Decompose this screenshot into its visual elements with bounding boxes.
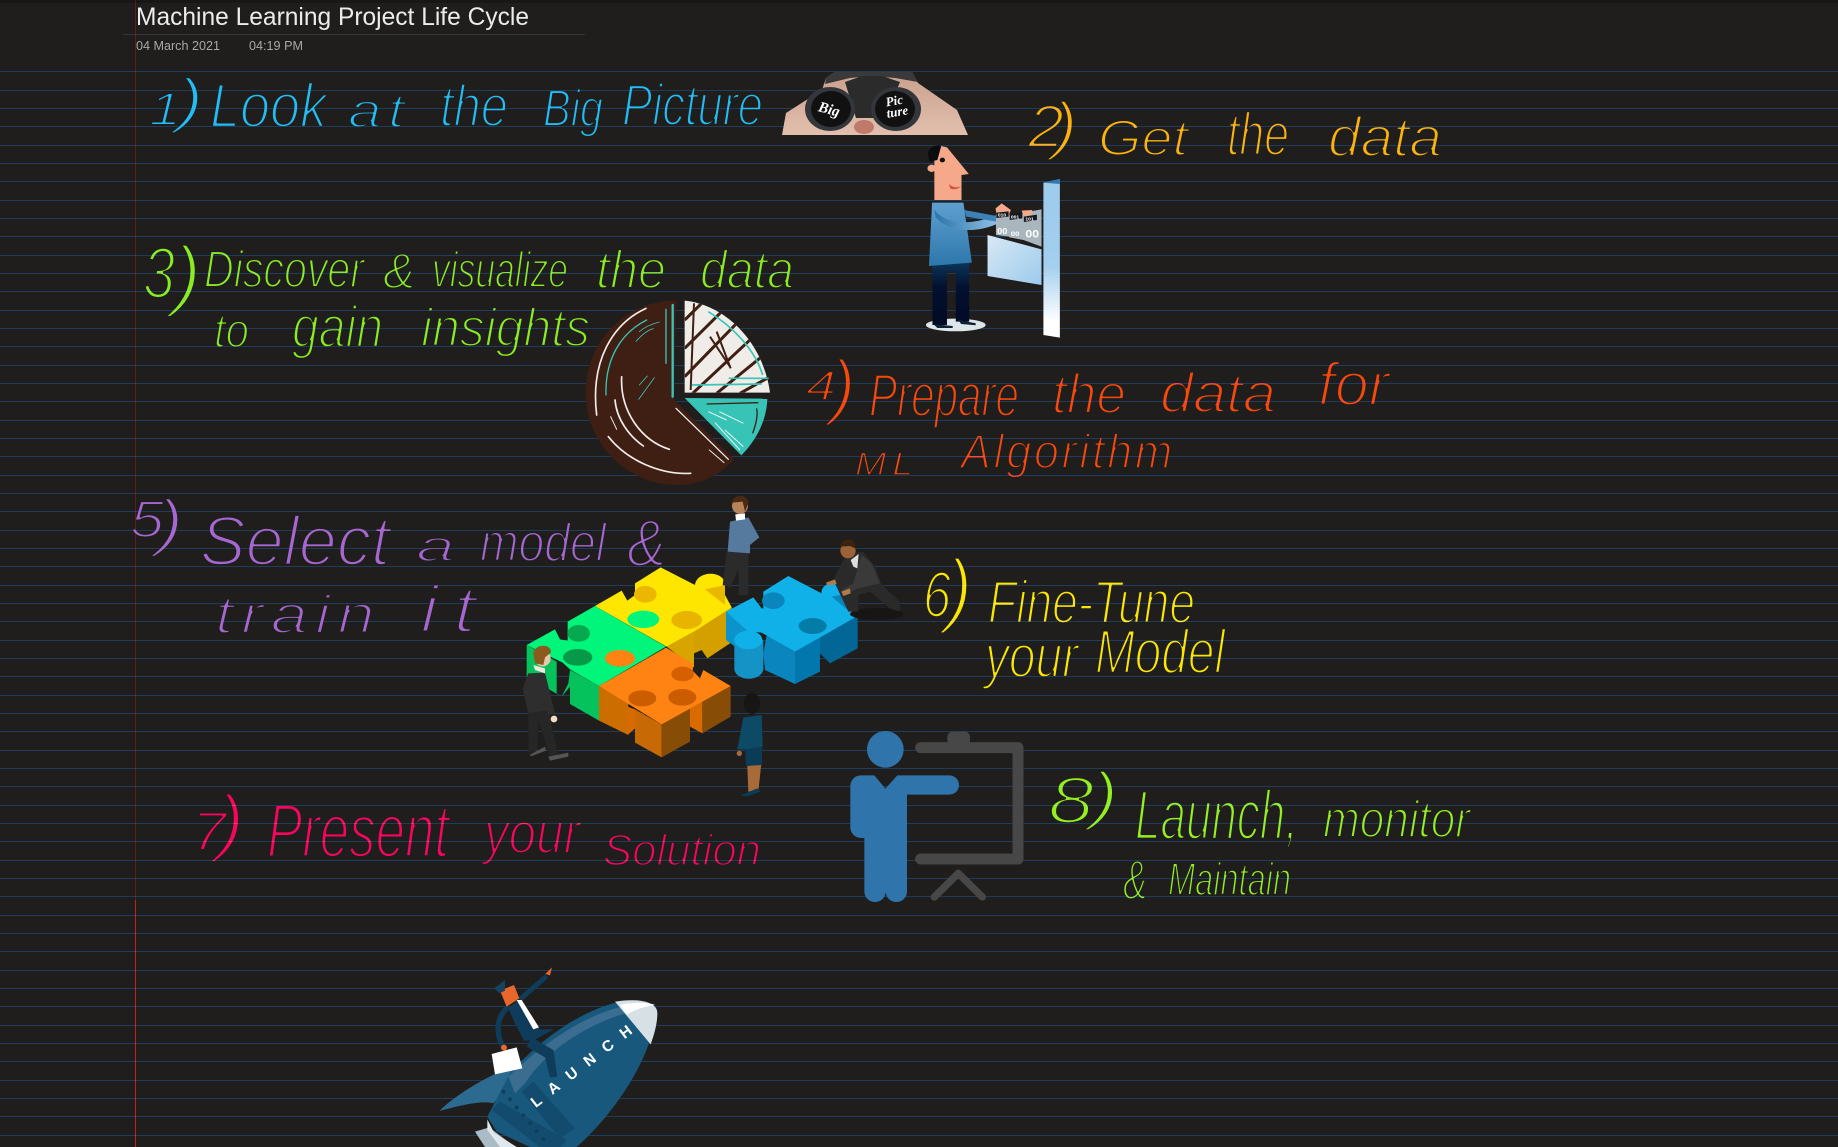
heading: step 8: Launch,	[1135, 776, 1298, 854]
heading: step 5: 5	[130, 491, 165, 549]
heading: step 2	[1027, 89, 1442, 168]
date and time	[136, 38, 303, 53]
icon: binoculars photo with Big Picture lenses: Pic	[884, 92, 904, 109]
heading: step 3: the	[596, 240, 666, 300]
heading: step 2: data	[1328, 105, 1442, 168]
heading: step 8: )	[1080, 759, 1119, 831]
heading: step 4: 4	[806, 362, 836, 409]
heading: step 4: Algorithm	[958, 426, 1175, 479]
heading: step 5: model	[480, 513, 608, 573]
heading: step 5: &	[627, 506, 666, 580]
heading: step 3: gain	[292, 295, 383, 360]
businessman	[492, 967, 557, 1077]
heading: step 2: 2	[1027, 93, 1064, 160]
person: man pushing blue piece	[826, 539, 903, 620]
illustration: man filing data in a cabinet: 101	[1025, 217, 1034, 222]
heading: step 3	[143, 229, 794, 360]
heading: step 3: insights	[421, 298, 590, 358]
heading: step 2: Get	[1098, 110, 1190, 166]
heading: step 1: Big	[543, 80, 603, 138]
puzzle: blue piece	[726, 576, 858, 684]
heading: step 8: monitor	[1323, 791, 1472, 849]
illustration: businessman riding a launch rocket	[439, 967, 657, 1147]
heading: step 1: at	[348, 85, 411, 138]
heading: step 1: )	[168, 67, 204, 134]
heading: step 7: )	[207, 780, 245, 863]
person: woman standing bottom	[737, 693, 763, 797]
heading: step 6: your	[982, 623, 1080, 690]
heading: step 3: data	[700, 240, 794, 300]
icon: binoculars photo with Big Picture lenses: Big	[815, 99, 842, 121]
heading: step 1: Picture	[622, 73, 763, 138]
illustration: man filing data in a cabinet: 00	[1011, 230, 1019, 238]
heading: step 2: )	[1043, 89, 1078, 161]
heading: step 1: 1	[149, 83, 181, 135]
heading: step 1	[149, 67, 763, 141]
person: man standing on top	[723, 496, 759, 595]
heading: step 4: for	[1318, 351, 1391, 418]
heading: step 1: the	[440, 74, 508, 139]
heading: step 5	[130, 488, 666, 646]
illustration: man filing data in a cabinet	[926, 145, 1060, 338]
heading: step 3: )	[163, 229, 202, 318]
illustration: man filing data in a cabinet: 00	[1025, 229, 1039, 240]
heading: step 7: Solution	[603, 826, 761, 875]
heading: step 3: to	[214, 305, 249, 358]
heading: step 7: 7	[192, 800, 229, 862]
date and time: 04 March 2021	[136, 38, 220, 53]
heading: step 6: Model	[1095, 618, 1227, 687]
heading: step 8: 8	[1048, 763, 1094, 837]
icon: presenter at a board	[850, 731, 1018, 902]
illustration: man filing data in a cabinet: 001	[1011, 215, 1020, 220]
heading: step 7: your	[481, 801, 582, 866]
heading: step 5: Select	[200, 502, 392, 580]
heading: step 6: Fine-Tune	[988, 569, 1195, 636]
rocket: fin and nozzle	[440, 1070, 512, 1111]
heading: step 1: Look	[210, 72, 330, 141]
heading: step 4: ML	[855, 446, 919, 482]
illustration: puzzle pieces with business people	[523, 496, 903, 797]
illustration: man filing data in a cabinet: 010	[998, 213, 1007, 218]
heading: step 4: )	[821, 346, 856, 427]
puzzle: yellow piece	[595, 567, 732, 667]
heading: step 4: data	[1160, 361, 1276, 424]
heading: step 7	[192, 780, 761, 875]
heading: step 6: )	[936, 542, 973, 635]
heading: step 4	[806, 346, 1391, 482]
heading: step 6	[923, 542, 1227, 690]
heading: step 2: the	[1227, 101, 1289, 168]
heading: step 3: 3	[143, 234, 175, 314]
heading: step 5: train	[215, 585, 382, 645]
illustration: man filing data in a cabinet: 00	[997, 227, 1008, 236]
heading: step 5: it	[420, 572, 491, 646]
icon: binoculars photo with Big Picture lenses	[782, 72, 968, 135]
rocket: body	[487, 1000, 657, 1147]
rocket: LAUNCH label: LAUNCH	[528, 1022, 636, 1111]
icon: binoculars photo with Big Picture lenses: ture	[885, 102, 909, 121]
heading: step 6: 6	[923, 558, 952, 631]
date and time: 04:19 PM	[249, 38, 303, 53]
heading: step 5: )	[147, 488, 184, 558]
illustration: pie chart	[586, 301, 770, 485]
heading: step 5: a	[416, 522, 455, 571]
puzzle: green piece	[527, 606, 666, 721]
heading: step 3: Discover	[204, 241, 366, 299]
heading: step 4: Prepare	[869, 362, 1019, 429]
title: Machine Learning Project Life Cycle	[136, 3, 529, 31]
heading: step 4: the	[1052, 362, 1126, 425]
person: man standing left	[523, 646, 568, 761]
heading: step 8: Maintain	[1168, 853, 1291, 905]
heading: step 3: visualize	[432, 242, 568, 298]
heading: step 7: Present	[267, 789, 451, 874]
heading: step 8	[1048, 759, 1472, 911]
heading: step 8: &	[1123, 848, 1147, 911]
puzzle: orange piece	[599, 648, 731, 757]
heading: step 3: &	[383, 243, 415, 299]
